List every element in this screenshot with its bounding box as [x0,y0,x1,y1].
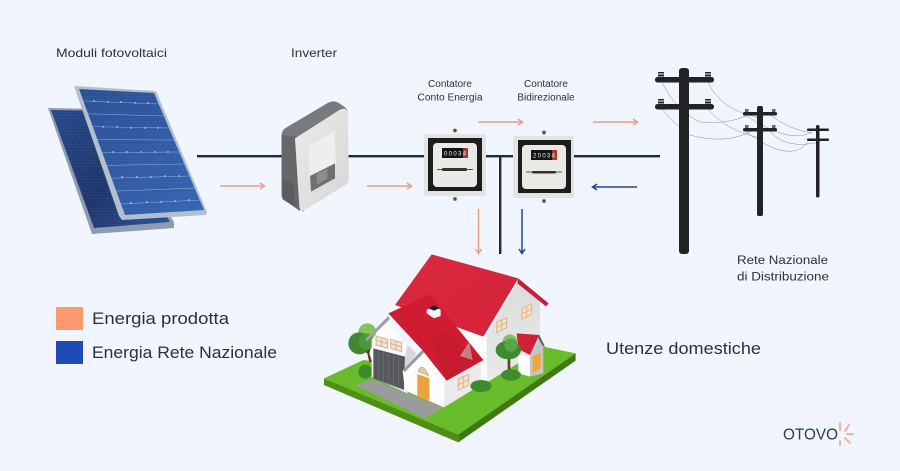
legend: Energia prodotta [56,307,230,330]
wiring: main power line [197,155,660,254]
label: Utenze domestiche: Utenze domestiche [606,339,761,358]
arrow: produced energy to house [476,209,482,254]
back solar panel [48,108,174,234]
left tree [348,323,376,379]
icon: meter Conto Energia [424,128,486,202]
heading: Moduli fotovoltaici: Moduli fotovoltaici [56,46,167,60]
garage window 2 [391,339,402,352]
heading: Contatore Conto Energia: Contatore [428,79,472,90]
porch [517,333,545,377]
arrow: inverter input [220,183,264,189]
arrow: inverter to meter [367,183,412,189]
wires [662,82,820,151]
upper window left [497,318,507,333]
main building [395,254,549,382]
right tree and bushes [470,334,521,392]
heading: Contatore Bidirezionale: Contatore [524,79,568,90]
lawn base [324,347,576,442]
garage wing [365,294,483,407]
legend: Energia Rete Nazionale [56,341,277,364]
large pole [655,68,714,254]
front solar panel [74,86,207,220]
icon: solar panels [48,86,207,234]
icon: meter Bidirezionale [513,130,574,204]
legend: Energia prodotta: Energia prodotta [92,309,230,328]
heading: Rete Nazionale di Distribuzione: Rete Nazionale [737,255,828,267]
heading: Contatore Conto Energia: Conto Energia [418,92,483,104]
arrow: to national grid [593,119,638,125]
heading: Rete Nazionale di Distribuzione: di Distribuzione [737,272,829,284]
icon: utility poles [655,68,829,254]
logo: OTOVO: OTOVO [783,426,838,444]
arrow: grid energy to house [519,209,525,254]
arrow: between meters [478,119,522,125]
heading: Inverter: Inverter [291,46,337,60]
icon: inverter [282,101,349,212]
meter reading: 00034 [444,152,467,158]
icon: house [324,254,576,442]
garage window 1 [376,336,388,348]
medium pole [743,106,777,216]
meter reading: 20034 [533,154,556,160]
small pole [807,125,829,198]
chimney [427,305,441,318]
logo: OTOVO [783,423,853,445]
heading: Contatore Bidirezionale: Bidirezionale [517,92,575,104]
legend: Energia Rete Nazionale: Energia Rete Nazionale [92,343,277,362]
side window [458,374,469,390]
legend [56,307,277,364]
driveway [355,379,443,418]
arrow: from national grid [592,184,637,190]
upper window right [522,304,532,319]
